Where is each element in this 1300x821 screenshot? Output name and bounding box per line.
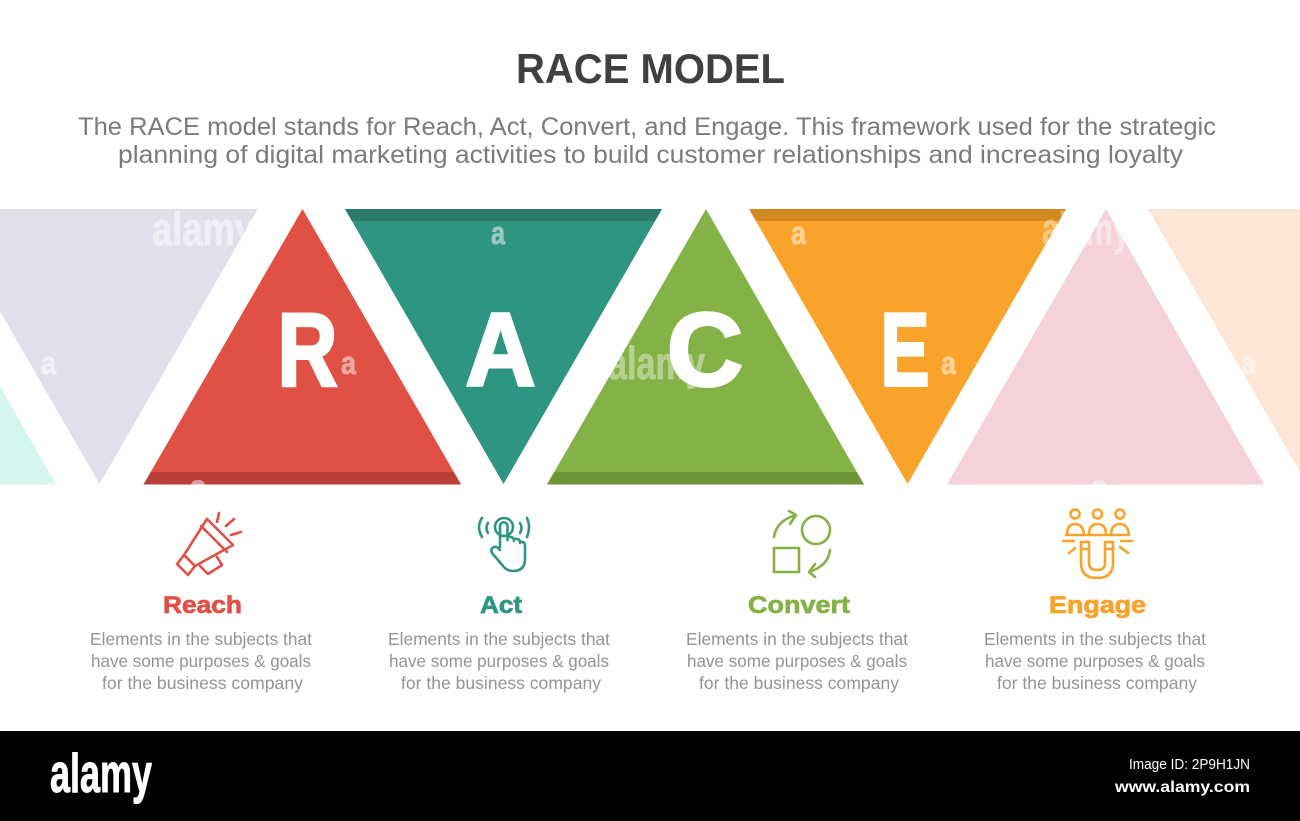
- letter A: A: [466, 292, 536, 408]
- column: Engage: [984, 510, 1206, 693]
- watermark marks: a: [941, 345, 956, 381]
- triangle: A: [340, 205, 665, 490]
- body text: Engage: have some purposes & goals: [985, 651, 1205, 671]
- watermark marks: alamy: [608, 337, 705, 389]
- letter E: E: [880, 292, 930, 408]
- body text: Convert: [686, 629, 908, 693]
- body text: Reach: [90, 629, 312, 693]
- letter R: R: [278, 292, 338, 408]
- icon: people and magnet: [1063, 510, 1132, 578]
- watermark marks: alamy: [1042, 203, 1130, 255]
- column: Convert: [686, 511, 908, 693]
- faded triangle: peach: [1148, 209, 1300, 484]
- icon: megaphone: [177, 513, 241, 575]
- watermark marks: a: [341, 345, 356, 381]
- body text: Convert: for the business company: [699, 673, 899, 693]
- letter C: C: [667, 292, 743, 408]
- watermark marks: [41, 203, 1256, 484]
- triangle: C: [540, 205, 870, 490]
- heading: Reach: Reach: [163, 592, 242, 619]
- watermark marks: a: [1241, 345, 1256, 381]
- watermark marks: alamy: [1042, 203, 1130, 255]
- triangle: R: [140, 205, 465, 490]
- column: Reach: [90, 513, 312, 693]
- body text: Convert: have some purposes & goals: [687, 651, 907, 671]
- heading: Engage: Engage: [1049, 592, 1146, 619]
- website: www.alamy.com: [1114, 779, 1250, 796]
- triangle band: [0, 203, 1300, 490]
- icon: shapes cycle: [774, 511, 830, 577]
- watermark marks: a: [41, 345, 56, 381]
- subtitle text: planning of digital marketing activities to build customer relationships and increasing loyalty: [118, 141, 1184, 169]
- faded triangle: pink: [947, 209, 1264, 484]
- heading: Convert: Convert: [748, 592, 850, 619]
- watermark marks: a: [491, 215, 505, 251]
- body text: Act: Elements in the subjects that: [388, 629, 610, 649]
- body text: Engage: for the business company: [997, 673, 1197, 693]
- triangle: E: [745, 205, 1070, 490]
- footer logo: alamy: [50, 742, 152, 804]
- body text: Act: have some purposes & goals: [389, 651, 609, 671]
- body text: Reach: for the business company: [102, 673, 303, 693]
- image id: Image ID: 2P9H1JN: [1129, 756, 1250, 773]
- subtitle text: The RACE model stands for Reach, Act, Convert, and Engage. This framework used for the strategic: [78, 113, 1216, 141]
- title: RACE MODEL: [516, 45, 785, 92]
- body text: Engage: [984, 629, 1206, 693]
- faded triangle: lavender: [0, 209, 258, 484]
- column: Act: [388, 518, 610, 693]
- heading: Act: Act: [480, 592, 522, 619]
- body text: Reach: Elements in the subjects that: [90, 629, 312, 649]
- body text: Act: for the business company: [401, 673, 601, 693]
- faded triangle: mint: [0, 209, 56, 484]
- footer bar: [0, 731, 1300, 821]
- watermark marks: alamy: [152, 203, 255, 255]
- icon: touch hand: [479, 518, 529, 571]
- body text: Reach: have some purposes & goals: [91, 651, 311, 671]
- body text: Engage: Elements in the subjects that: [984, 629, 1206, 649]
- body text: Convert: Elements in the subjects that: [686, 629, 908, 649]
- watermark marks: a: [791, 215, 806, 251]
- subtitle text: [78, 113, 1216, 169]
- body text: Act: [388, 629, 610, 693]
